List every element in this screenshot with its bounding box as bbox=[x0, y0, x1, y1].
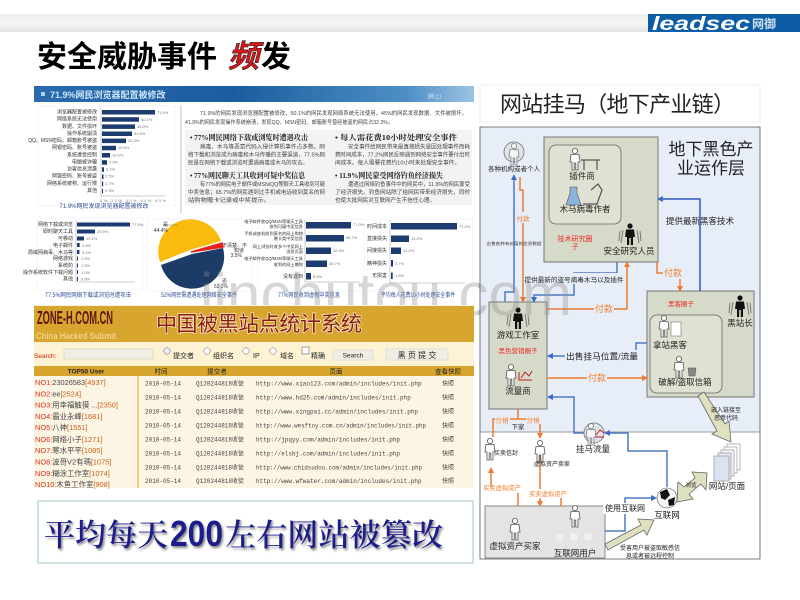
search row bbox=[34, 342, 474, 366]
chart: prize messages: 收到的网上赠物 bbox=[274, 261, 303, 268]
report header bar: 71.9%网民浏览器配置被修改 bbox=[50, 89, 166, 100]
table header: TOP50 User bbox=[68, 368, 105, 376]
table rows: 快照 bbox=[442, 464, 454, 472]
arrow: embed code bbox=[698, 392, 741, 442]
chart: prize messages: 77.0% bbox=[353, 222, 365, 227]
arrow labels: 付款 bbox=[595, 303, 613, 314]
banner: daily defaced sites: 左右网站被篡改 bbox=[225, 518, 443, 553]
chart: download attacks: 网络游戏 bbox=[53, 255, 73, 262]
icon: virtual asset seller: 虚拟资产卖家 bbox=[534, 460, 570, 468]
heading: underground layer bbox=[668, 140, 754, 178]
bar chart: browser modification: 访客信息泄露 bbox=[67, 166, 97, 172]
report text: 络下载和浏览成为病毒和木马传播的主要渠道，77.5%网 bbox=[188, 150, 325, 158]
icon: web pages stack: 网站/页面 bbox=[709, 481, 746, 491]
table rows: Q120244818收徒 bbox=[196, 394, 244, 402]
chart: pie: 52%网民需遭遇处理网络安全事件 bbox=[161, 291, 237, 299]
chart: prize messages: 电子邮件收QQ/MSN等聊天工具 bbox=[244, 255, 304, 262]
chart: time cost: 时间成本 bbox=[367, 223, 387, 230]
chart: time cost: 精神损失 bbox=[367, 260, 387, 267]
table header: 时间 bbox=[154, 366, 168, 376]
chart: pie: 是 bbox=[163, 222, 168, 228]
box: game studio and traffic dealer: 黑色营销圈子 bbox=[498, 346, 538, 355]
chart: prize messages: 77%网民收到虚假中奖信息 bbox=[278, 291, 340, 299]
bar chart: browser modification: 10.6% bbox=[112, 152, 124, 158]
bar chart: browser modification: 网络系统被称、运行慢 bbox=[47, 180, 97, 187]
bar chart: browser modification: 3.1% bbox=[106, 166, 116, 172]
arrow labels: 付款 bbox=[516, 214, 530, 223]
arrow: users to internet bbox=[605, 519, 680, 560]
arrows: blue flows bbox=[505, 176, 700, 531]
chart: prize messages: 赠卡类中奖信息 bbox=[274, 235, 303, 242]
header band bbox=[0, 14, 800, 32]
report text: 民是在网络下载或浏览时遭遇病毒或木马的攻击。 bbox=[188, 158, 308, 166]
table rows: Q120244818收徒 bbox=[196, 380, 244, 388]
site banner: ZONE-H.COM.CN bbox=[37, 308, 113, 328]
report text: 了经济损失。钓鱼网站除了给网民带来经济损失，同时 bbox=[335, 188, 470, 196]
report text: 站购物赠卡记录或中奖提示。 bbox=[188, 196, 270, 204]
chart: time cost: 2.7% bbox=[395, 261, 405, 266]
chart: pie: 不清楚、不 bbox=[222, 242, 247, 249]
search row: 域名 bbox=[280, 351, 294, 360]
arrow: embed code: 恶意代码 bbox=[714, 414, 738, 422]
bar chart: browser modification: 19.6% bbox=[118, 145, 130, 150]
report text: • 11.9%网民蒙受网络钓鱼经济损失 bbox=[335, 171, 444, 180]
table rows: Q120244818收徒 bbox=[196, 408, 244, 416]
search row: 提交者 bbox=[173, 351, 194, 360]
banner: daily defaced sites: 200 bbox=[170, 513, 223, 554]
table rows: 快照 bbox=[442, 380, 454, 388]
arrow labels: 使用互联网 bbox=[605, 503, 645, 513]
title: 频 bbox=[228, 39, 264, 74]
panel: China hacked submit system bbox=[34, 305, 474, 489]
box: game studio and traffic dealer: 流量商 bbox=[505, 386, 531, 396]
report text: • 77%网民网络下载或浏览时遭遇攻击 bbox=[190, 133, 309, 142]
chart: prize messages: 网上浏览时收多个中奖网上 bbox=[253, 243, 303, 250]
search row: 组织名 bbox=[213, 351, 234, 360]
table rows: http://elsbj.com/admin/includes/init.php bbox=[256, 450, 400, 458]
diagram: underground industry chain bbox=[480, 127, 760, 560]
arrow labels: 下家 bbox=[512, 422, 525, 431]
icon: internet globe bbox=[654, 488, 680, 520]
chart: download attacks: 77.5% bbox=[132, 222, 144, 227]
report text: 间成本。每人需要花费约10小时来处理安全事件。 bbox=[335, 158, 460, 166]
bar chart: browser modification: 数据、文件损坏 bbox=[62, 123, 97, 130]
chart: prize messages: 消息页面 bbox=[286, 248, 303, 255]
top user list: NO5:八神[1551] bbox=[35, 423, 88, 432]
report text: 71.9%的网民发现浏览器配置被修改，50.1%的网民发现网络系统无法使用，45%的网民发现数据、文件被损坏， bbox=[200, 109, 467, 117]
box: buyers and users: 虚拟资产买家 bbox=[489, 541, 541, 551]
table rows: 2010-05-14 bbox=[145, 464, 181, 472]
bar chart: browser modification: 2.5% bbox=[105, 174, 115, 178]
top user list: NO6:网络小子[1271] bbox=[35, 435, 102, 444]
chart: pie: 52.1% bbox=[214, 284, 229, 290]
site banner: 中国被黑站点统计系统 bbox=[156, 313, 362, 336]
box: hacker circle: 破解/盗取信箱 bbox=[658, 377, 712, 387]
search row: Search bbox=[343, 352, 364, 360]
icon: internet globe: 互联网 bbox=[654, 510, 680, 520]
heading: underground layer: 地下黑色产 bbox=[668, 140, 754, 159]
top user list: NO1:23026583[4937] bbox=[35, 378, 106, 387]
arrow: embed code: 嵌入链接至 bbox=[711, 406, 741, 414]
report text bbox=[181, 105, 472, 213]
bar chart: browser modification: 71.9%网民发现浏览器配置被修改 bbox=[59, 202, 149, 210]
table rows: 2010-05-14 bbox=[145, 394, 181, 402]
bar chart: browser modification: 操作系统崩溃 bbox=[67, 130, 97, 137]
chart: download attacks: 其他 bbox=[63, 276, 73, 282]
site banner: China Hacked Submit bbox=[36, 331, 116, 341]
search row: Search: bbox=[34, 353, 57, 360]
arrow: users to internet: 受害用户被盗取敏感信 bbox=[620, 544, 680, 552]
report text: • 77%网民聊天工具收到可疑中奖信息 bbox=[190, 171, 306, 180]
report text: 41.9%的网民发现操作系统崩溃，发现QQ、MSN密码、邮箱账号曾经被盗的网民占32.3%。 bbox=[185, 118, 393, 126]
chart: prize messages: 手机或座机收到莫名的网上购物 bbox=[244, 230, 303, 237]
icon: web pages stack bbox=[709, 444, 746, 491]
report text: 遭遇过网络钓鱼事件中的网民中，11.9%的网民蒙受 bbox=[348, 180, 470, 188]
icon: trojan traffic bbox=[576, 423, 610, 454]
chart: download attacks: 操作系统软件下载问题 bbox=[23, 269, 73, 276]
table header: 页面 bbox=[330, 368, 343, 376]
box: hacker circle bbox=[647, 291, 754, 397]
bar chart: browser modification bbox=[28, 106, 175, 210]
table rows: http://www.xiao123.com/admin/includes/init.php bbox=[256, 380, 422, 388]
table header: 查看快照 bbox=[435, 366, 462, 376]
box: hacker circle: 黑客圈子 bbox=[668, 299, 694, 308]
table header bbox=[34, 366, 474, 376]
chart: time cost: 无损害 bbox=[372, 272, 387, 279]
bar chart: browser modification: 32.3% bbox=[128, 138, 140, 143]
bar chart: browser modification: 45.0% bbox=[137, 124, 149, 129]
report text: 中奖信息；65.7%的网民遇到过手机或电话收到莫名的网 bbox=[188, 188, 325, 196]
table rows: 快照 bbox=[442, 408, 454, 416]
arrow labels: 付款 bbox=[664, 267, 682, 278]
chart: download attacks: 0.8% bbox=[81, 276, 91, 282]
title: 发 bbox=[261, 41, 291, 74]
box: technical research circle: 子 bbox=[572, 243, 578, 251]
arrow labels: 买卖虚拟资产 bbox=[483, 483, 521, 492]
title: 安全威胁事件 bbox=[37, 41, 217, 74]
arrow labels bbox=[483, 212, 734, 514]
box: technical research circle bbox=[544, 137, 658, 262]
top user list: NO4:霸业永峰[1681] bbox=[35, 412, 102, 421]
chart: pie: 3.5% bbox=[231, 253, 243, 259]
search row: IP bbox=[253, 353, 260, 360]
chart: download attacks: 网络下载或浏览 bbox=[38, 221, 73, 228]
box: technical research circle: 插件商 bbox=[569, 171, 595, 181]
chart: download attacks: 77.5%网民网络下载或浏览时遭攻击 bbox=[45, 291, 131, 299]
icon: trade letters: 买卖信封 bbox=[494, 449, 518, 457]
chart: download attacks: 1.0% bbox=[81, 270, 91, 275]
title bbox=[37, 39, 291, 74]
arrow labels: 出售挂马位置/流量 bbox=[566, 352, 638, 362]
top user list: NO7:寒水平平[1085] bbox=[35, 446, 102, 455]
table rows: http://www.xingpai.cc/admin/includes/init.php bbox=[256, 408, 418, 416]
bar chart: browser modification: QQ、MSN密码、邮箱账号被盗 bbox=[28, 137, 97, 144]
chart: time cost: 12.2% bbox=[403, 248, 415, 253]
arrow: browsing double arrow: 浏览 bbox=[685, 481, 697, 489]
report text: 有77%的网民电子邮件或MSN/QQ等聊天工具收到可疑 bbox=[200, 180, 325, 188]
chart: time cost: 1.8% bbox=[395, 273, 405, 278]
box: technical research circle: 木马病毒作者 bbox=[559, 204, 611, 214]
table rows: http://www.wfwater.com/admin/includes/init.php bbox=[256, 478, 422, 485]
box: game studio and traffic dealer: 游戏工作室 bbox=[497, 330, 540, 340]
panel: four mini charts bbox=[23, 218, 473, 299]
report header bar: [网上] bbox=[428, 93, 441, 100]
table rows: Q120244818收徒 bbox=[196, 436, 244, 444]
chart: download attacks: 系统的 bbox=[58, 262, 73, 269]
box: buyers and users: 互联网用户 bbox=[554, 548, 596, 558]
box: technical research circle: 技术研究圈 bbox=[558, 234, 592, 243]
arrow labels: 提供最新黑客技术 bbox=[666, 216, 734, 226]
arrow: users to internet: 息或者被远程控制 bbox=[626, 552, 674, 560]
report text: 病毒、木马等恶意代码入侵计算机事件占多数。网 bbox=[200, 142, 325, 150]
chart: download attacks: 1.5% bbox=[81, 263, 91, 268]
box: technical research circle: 安全研究人员 bbox=[603, 246, 655, 256]
table rows: 2010-05-14 bbox=[145, 408, 181, 416]
report header bar bbox=[34, 86, 474, 102]
bar chart: browser modification: 0.3% bbox=[105, 188, 115, 193]
search row: 黑 页 提 交 bbox=[398, 350, 436, 360]
table rows: 2010-05-14 bbox=[145, 478, 181, 485]
table rows: 2010-05-14 bbox=[145, 450, 181, 458]
chart: prize messages: 35.7% bbox=[329, 261, 341, 266]
chart: download attacks: 25.9% bbox=[97, 229, 109, 234]
bar chart: browser modification: 50.1% bbox=[141, 117, 153, 122]
heading box: web trojan underground chain bbox=[480, 85, 760, 122]
table rows: 快照 bbox=[442, 436, 454, 444]
logo: leadsec bbox=[648, 14, 800, 35]
top user list bbox=[35, 376, 138, 489]
panel: browser survey report bbox=[28, 85, 474, 215]
chart: prize messages: 8.6% bbox=[313, 274, 323, 279]
box: hacker circle: 黑站长 bbox=[727, 318, 753, 328]
table rows: http://www.wesftoy.com.cn/admin/includes/init.php bbox=[256, 422, 426, 430]
table rows: Q120244818收徒 bbox=[196, 422, 244, 430]
chart: download attacks: 电子邮件 bbox=[53, 242, 73, 249]
chart: pie: 44.4% bbox=[154, 228, 169, 234]
chart: download attacks: 可移动 bbox=[58, 235, 73, 242]
table rows: 2010-05-14 bbox=[145, 380, 181, 388]
box: hacker circle: 拿站黑客 bbox=[653, 340, 687, 350]
banner: daily defaced sites: 平均每天 bbox=[44, 518, 168, 553]
arrow labels: 提供最新的盗号病毒木马以及插件 bbox=[524, 275, 624, 284]
report text: 费时间成本，77.2%网民反映遇到网络安全事件要付出时 bbox=[335, 150, 470, 158]
bar chart: browser modification: 其他 bbox=[87, 187, 97, 194]
chart: download attacks bbox=[23, 218, 144, 299]
table rows: 2010-05-14 bbox=[145, 436, 181, 444]
table rows bbox=[145, 380, 454, 485]
table rows: http://jpqyy.com/admin/includes/init.php bbox=[256, 436, 400, 444]
chart: time cost: 间接损失 bbox=[367, 247, 387, 254]
top user list: NO3:用幸福触摸 ...[2350] bbox=[35, 400, 118, 410]
chart: pie bbox=[147, 219, 252, 299]
table header: 提交者 bbox=[207, 366, 227, 376]
arrow: browsing double arrow bbox=[677, 472, 707, 502]
bar chart: browser modification: 0% 20% 40% 60% 80% bbox=[100, 198, 166, 203]
icon: organizations or individuals: 各种机构或者个人 bbox=[488, 164, 540, 173]
chart: time cost: 77.2% bbox=[459, 224, 471, 229]
bar chart: browser modification: 1.7% bbox=[105, 181, 115, 186]
arrows: orange flows bbox=[491, 177, 680, 506]
search row: 精确 bbox=[311, 351, 325, 360]
top user list: NO8:波哥V2有瑪[1075] bbox=[35, 458, 111, 466]
table rows: 快照 bbox=[442, 477, 454, 485]
bar chart: browser modification: 7.6% bbox=[109, 160, 119, 164]
bar chart: browser modification: 网银密码、账号被盗 bbox=[52, 144, 97, 151]
table rows: 快照 bbox=[442, 394, 454, 402]
banner: daily defaced sites bbox=[38, 501, 473, 563]
icon: organizations or individuals bbox=[488, 142, 540, 173]
report text: • 每人需花费10小时处理安全事件 bbox=[335, 133, 458, 142]
report text: 安全事件给网民带来最直接损失是因处理事件而耗 bbox=[348, 142, 470, 150]
logo: leadsec: 网御 bbox=[752, 16, 776, 31]
box: game studio and traffic dealer bbox=[489, 302, 547, 409]
bar chart: browser modification: 网络系统无法使用 bbox=[57, 116, 97, 122]
table rows: Q120244818收徒 bbox=[196, 464, 244, 472]
watermark: jinchutou.com bbox=[198, 261, 572, 328]
chart: download attacks: 10.1% bbox=[86, 236, 98, 241]
chart: time cost: 平均每人花费10小时处理安全事件 bbox=[381, 291, 455, 299]
chart: download attacks: 局域网病毒、木马等 bbox=[28, 249, 73, 256]
bar chart: browser modification: 网银密码、账号被盗 bbox=[52, 172, 97, 180]
arrow labels: 买卖虚拟资产 bbox=[529, 489, 567, 498]
table rows: http://www.hd25.com/admin/includes/init.php bbox=[256, 394, 411, 402]
bar chart: browser modification: 电脑被诈骗 bbox=[72, 158, 97, 166]
table rows: 2010-05-14 bbox=[145, 422, 181, 430]
chart: prize messages: 收到可疑中奖信息 bbox=[269, 223, 303, 230]
site banner bbox=[34, 306, 474, 342]
box: buyers and users bbox=[485, 505, 605, 558]
chart: prize messages: 电子邮件收QQ/MSN等聊天工具 bbox=[244, 218, 304, 225]
heading: underground layer: 业运作层 bbox=[677, 159, 745, 178]
report text: 也使大批网民对互联网产生不信任心理。 bbox=[335, 196, 435, 204]
arrow labels: 出售各种有价值的信息数据 bbox=[486, 240, 542, 246]
table rows: 快照 bbox=[442, 450, 454, 458]
icon: trojan traffic: 挂马流量 bbox=[576, 444, 610, 454]
chart: download attacks: 1.5% bbox=[81, 256, 91, 261]
chart: time cost: 14.2% bbox=[411, 236, 423, 241]
chart: pie: 否 bbox=[222, 279, 227, 285]
arrow labels: 分销 bbox=[526, 416, 540, 424]
arrow labels: 付款 bbox=[588, 372, 606, 383]
chart: prize messages: 没有遇到 bbox=[283, 273, 303, 280]
table rows: 快照 bbox=[442, 422, 454, 430]
icon: virtual asset seller bbox=[534, 440, 570, 468]
table rows: Q120244818收徒 bbox=[196, 450, 244, 458]
table rows: http://www.chidsudou.com/admin/includes/init.php bbox=[256, 464, 422, 472]
bar chart: browser modification: 系统遭受控制 bbox=[67, 152, 97, 158]
bar chart: browser modification: 71.9% bbox=[157, 110, 169, 115]
heading box: web trojan underground chain: 网站挂马（地下产业链） bbox=[500, 92, 735, 117]
chart: prize messages: 65.7% bbox=[346, 235, 358, 240]
chart: download attacks: 3.4% bbox=[82, 250, 92, 255]
top user list: NO10:木鱼工作室[908] bbox=[35, 480, 110, 489]
chart: time cost bbox=[367, 219, 473, 299]
chart: download attacks: 3.6% bbox=[82, 243, 92, 248]
icon: trade letters bbox=[485, 438, 518, 460]
arrow labels: 分销 bbox=[496, 416, 509, 424]
chart: time cost: 直接损失 bbox=[367, 235, 387, 242]
top user list: NO9:糊涂工作室[1074] bbox=[35, 469, 110, 478]
chart: download attacks: 即时聊天工具 bbox=[43, 228, 73, 235]
bar chart: browser modification: 浏览器配置被修改 bbox=[57, 108, 97, 116]
chart: pie: 知道 bbox=[234, 247, 244, 254]
chart: prize messages: 39.3% bbox=[333, 248, 345, 253]
watermark over diagram: jinchutou.com bbox=[198, 261, 572, 328]
table rows: Q120244818收徒 bbox=[196, 477, 244, 485]
logo: leadsec: leadsec bbox=[652, 14, 751, 35]
chart: prize messages bbox=[244, 218, 365, 299]
top user list: NO2:ee[2524] bbox=[35, 390, 81, 398]
bar chart: browser modification: 41.9% bbox=[134, 131, 146, 136]
